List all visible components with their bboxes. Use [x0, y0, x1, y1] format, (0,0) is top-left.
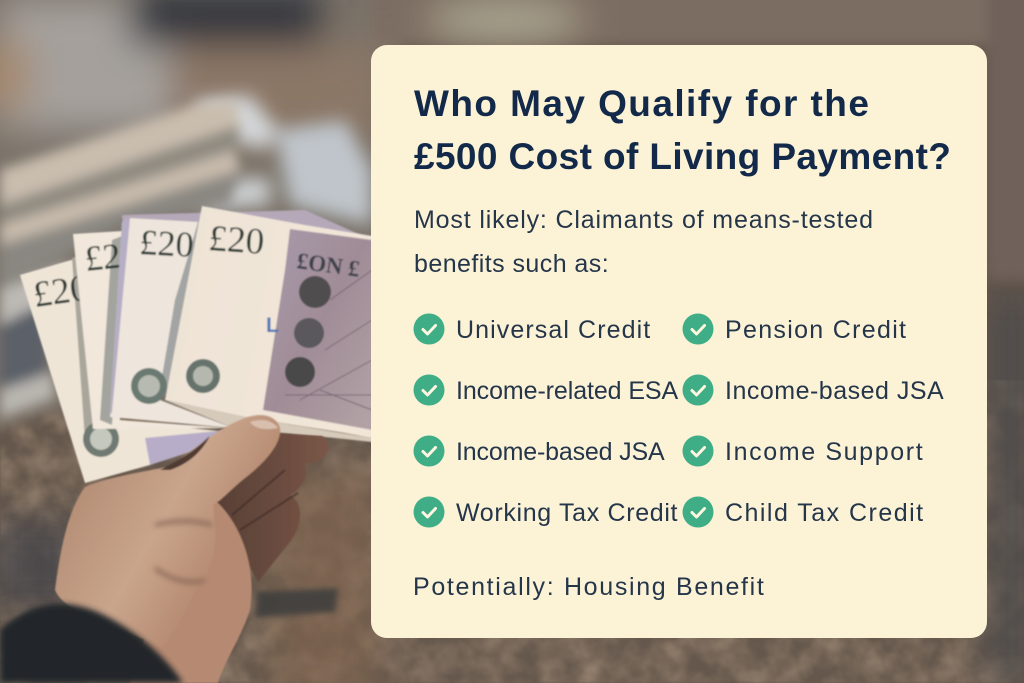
intro text: Most likely: Claimants of means-tested [414, 206, 874, 234]
third note [110, 218, 233, 428]
title: Who May Qualify for the [414, 83, 870, 124]
second note [73, 231, 230, 429]
banknotes: £ON £ [295, 248, 361, 282]
table texture [0, 380, 1024, 683]
front note [165, 206, 372, 438]
benefit: Working Tax Credit: Working Tax Credit [456, 499, 678, 527]
banknotes: £20 [139, 222, 195, 265]
benefit: Income-based JSA (left): Income-based JSA [456, 438, 664, 466]
footer text: Housing Benefit: Potentially: Housing Benefit [413, 573, 766, 601]
benefit: Income-based JSA (right): Income-based JSA [725, 377, 944, 405]
panel: eligibility card [371, 45, 987, 638]
banknotes: L [266, 314, 279, 337]
banknotes: £20 [207, 218, 266, 263]
benefit: Pension Credit: Pension Credit [725, 316, 907, 344]
title [414, 83, 951, 177]
benefit: Income-based JSA (left) [414, 436, 714, 514]
benefit: Income-related ESA: Income-related ESA [456, 377, 678, 405]
benefit: Universal Credit: Universal Credit [456, 316, 651, 344]
hand [55, 415, 328, 683]
banknotes [20, 206, 372, 483]
intro text [414, 206, 874, 278]
banknotes: £20 [83, 234, 141, 279]
palm [130, 498, 252, 683]
benefit: Income Support: Income Support [725, 438, 924, 466]
fingers [190, 433, 328, 582]
intro text: benefits such as: [414, 250, 609, 278]
back note [20, 258, 228, 483]
title: £500 Cost of Living Payment? [414, 136, 951, 177]
benefit: Child Tax Credit: Child Tax Credit [725, 499, 925, 527]
banknotes: £20 [31, 268, 91, 316]
back of hand and thumb [55, 415, 280, 648]
table shadow [255, 588, 338, 618]
sleeve [0, 604, 183, 683]
